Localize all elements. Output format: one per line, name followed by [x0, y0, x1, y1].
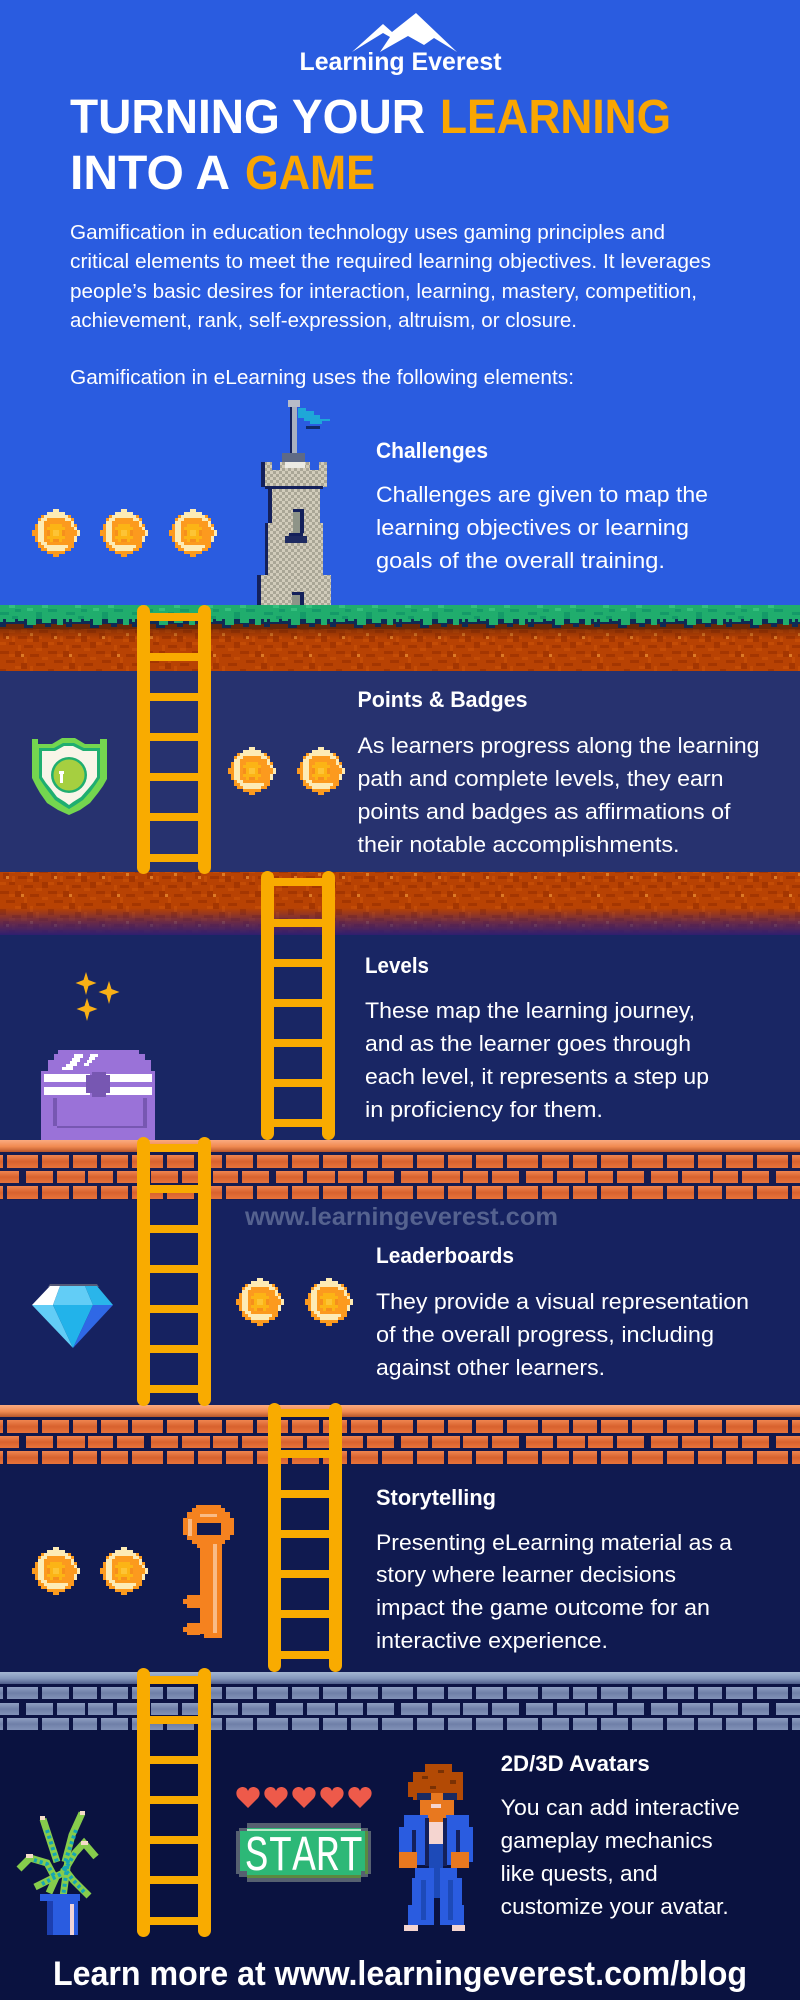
heading: levels: Levels: [365, 953, 429, 978]
intro text: Gamification in eLearning uses the following elements:: [70, 366, 574, 389]
body: levels: These map the learning journey,: [365, 998, 695, 1023]
body: leaderboards: They provide a visual representation: [376, 1289, 749, 1314]
icon: avatar character: [399, 1764, 473, 1931]
ladder 3: [137, 1137, 211, 1406]
body: levels: [365, 998, 709, 1122]
body: points and badges: As learners progress along the learning: [358, 733, 760, 758]
panel: levels background: [0, 935, 800, 1140]
title: INTO A: [70, 147, 230, 200]
heading: leaderboards: Leaderboards: [376, 1243, 514, 1268]
icon: diamond: [32, 1284, 113, 1348]
body: avatars: You can add interactive: [501, 1795, 740, 1820]
icon: hearts row: [236, 1787, 372, 1808]
platform: brick 1: [0, 1140, 800, 1200]
icon: orange key: [183, 1505, 234, 1638]
watermark url: www.learningeverest.com: [244, 1203, 558, 1231]
body: challenges: Challenges are given to map the: [376, 482, 708, 507]
coins row: storytelling: [32, 1547, 148, 1595]
title: LEARNING: [440, 91, 671, 144]
body: leaderboards: [376, 1289, 749, 1380]
icon: mountain: [352, 13, 457, 52]
body: storytelling: Presenting eLearning material as a: [376, 1530, 733, 1555]
body: challenges: learning objectives or learning: [376, 515, 689, 540]
coins row: points: [228, 747, 345, 795]
platform: brick 2: [0, 1405, 800, 1465]
text block: levels: [365, 953, 709, 1122]
icon: castle tower with flag: [257, 400, 331, 605]
heading: avatars: 2D/3D Avatars: [501, 1751, 650, 1776]
ladder 4: [268, 1403, 342, 1672]
platform: stone brick: [0, 1672, 800, 1732]
title: GAME: [245, 147, 375, 200]
text block: challenges: [376, 438, 708, 573]
heading: storytelling: Storytelling: [376, 1485, 496, 1510]
body: points and badges: points and badges as affirmations of: [358, 799, 731, 824]
body: storytelling: story where learner decisions: [376, 1562, 676, 1587]
text block: points and badges: [358, 687, 760, 857]
body: storytelling: impact the game outcome for an: [376, 1595, 710, 1620]
body: leaderboards: against other learners.: [376, 1355, 605, 1380]
body: levels: and as the learner goes through: [365, 1031, 691, 1056]
text block: avatars: [501, 1751, 740, 1919]
ladder 5: [137, 1668, 211, 1937]
heading: points and badges: Points & Badges: [358, 687, 528, 712]
icon: sparkles: [76, 972, 120, 1021]
body: challenges: goals of the overall training.: [376, 548, 665, 573]
ground: grass and dirt: [0, 605, 800, 671]
body: avatars: gameplay mechanics: [501, 1828, 713, 1853]
panel: points background: [0, 671, 800, 872]
ladder 1: [137, 605, 211, 874]
text block: storytelling: [376, 1485, 733, 1653]
panel: avatars background: [0, 1730, 800, 2000]
body: storytelling: [376, 1530, 733, 1653]
body: storytelling: interactive experience.: [376, 1628, 608, 1653]
ladder 2: [261, 871, 335, 1140]
body: points and badges: [358, 733, 760, 857]
body: challenges: [376, 482, 708, 573]
panel: leaderboards background: [0, 1200, 800, 1406]
logo wordmark: Learning Everest: [300, 48, 502, 76]
coins row: challenges: [32, 509, 217, 557]
body: levels: each level, it represents a step up: [365, 1064, 709, 1089]
logo: [300, 13, 502, 76]
body: avatars: customize your avatar.: [501, 1894, 729, 1919]
icon: shield badge: [32, 738, 107, 815]
body: points and badges: path and complete levels, they earn: [358, 766, 724, 791]
ground: dirt ceiling: [0, 872, 800, 935]
title: [70, 91, 671, 200]
body: avatars: [501, 1795, 740, 1919]
button: start: START: [245, 1829, 363, 1886]
title: TURNING YOUR: [70, 91, 425, 144]
intro text: critical elements to meet the required learning objectives. It leverages: [70, 250, 711, 273]
body: levels: in proficiency for them.: [365, 1097, 603, 1122]
panel: storytelling background: [0, 1465, 800, 1672]
icon: potted plant: [19, 1811, 96, 1935]
footer call to action: Learn more at www.learningeverest.com/blog: [53, 1955, 747, 1993]
body: leaderboards: of the overall progress, including: [376, 1322, 714, 1347]
intro text: Gamification in education technology uses gaming principles and: [70, 221, 665, 244]
heading: challenges: Challenges: [376, 438, 488, 463]
body: avatars: like quests, and: [501, 1861, 658, 1886]
panel: sky background: [0, 0, 800, 606]
icon: purple treasure chest: [41, 1050, 155, 1140]
coins row: leaderboards: [236, 1278, 353, 1326]
intro text: people’s basic desires for interaction, learning, mastery, competition,: [70, 280, 697, 303]
body: points and badges: their notable accomplishments.: [358, 832, 680, 857]
intro text: [70, 221, 711, 389]
text block: leaderboards: [376, 1243, 749, 1380]
intro text: achievement, rank, self-expression, altruism, or closure.: [70, 309, 577, 332]
